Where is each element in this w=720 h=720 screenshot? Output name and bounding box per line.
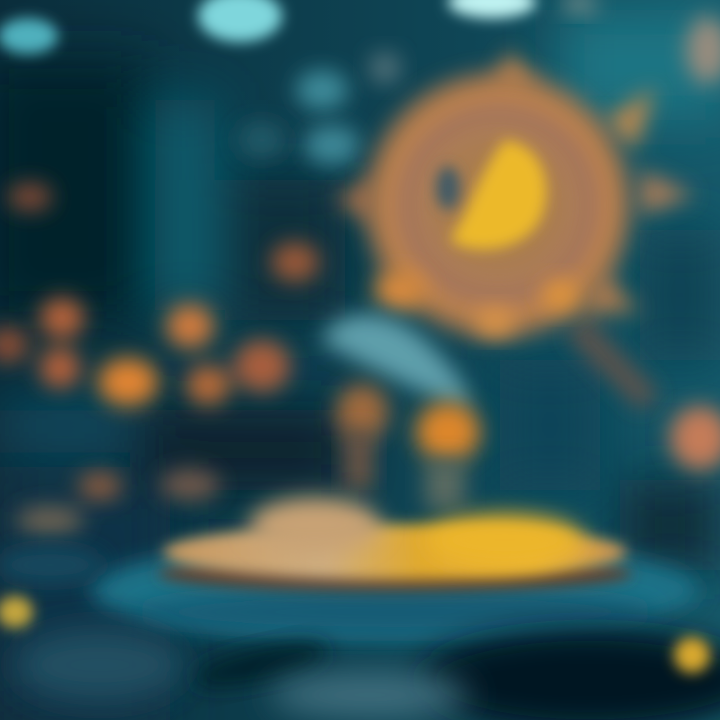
gear: yellow centre xyxy=(450,140,547,250)
foreground shadows and lights xyxy=(0,547,720,720)
gear: spikes xyxy=(335,50,695,410)
gear: body xyxy=(364,71,632,339)
lights: top bokeh xyxy=(0,0,720,165)
gear: dark spot xyxy=(436,166,460,210)
dish: golden food xyxy=(163,524,627,580)
dish xyxy=(90,497,700,640)
mushroom figure xyxy=(320,314,480,510)
orange bokeh lights xyxy=(0,183,720,534)
